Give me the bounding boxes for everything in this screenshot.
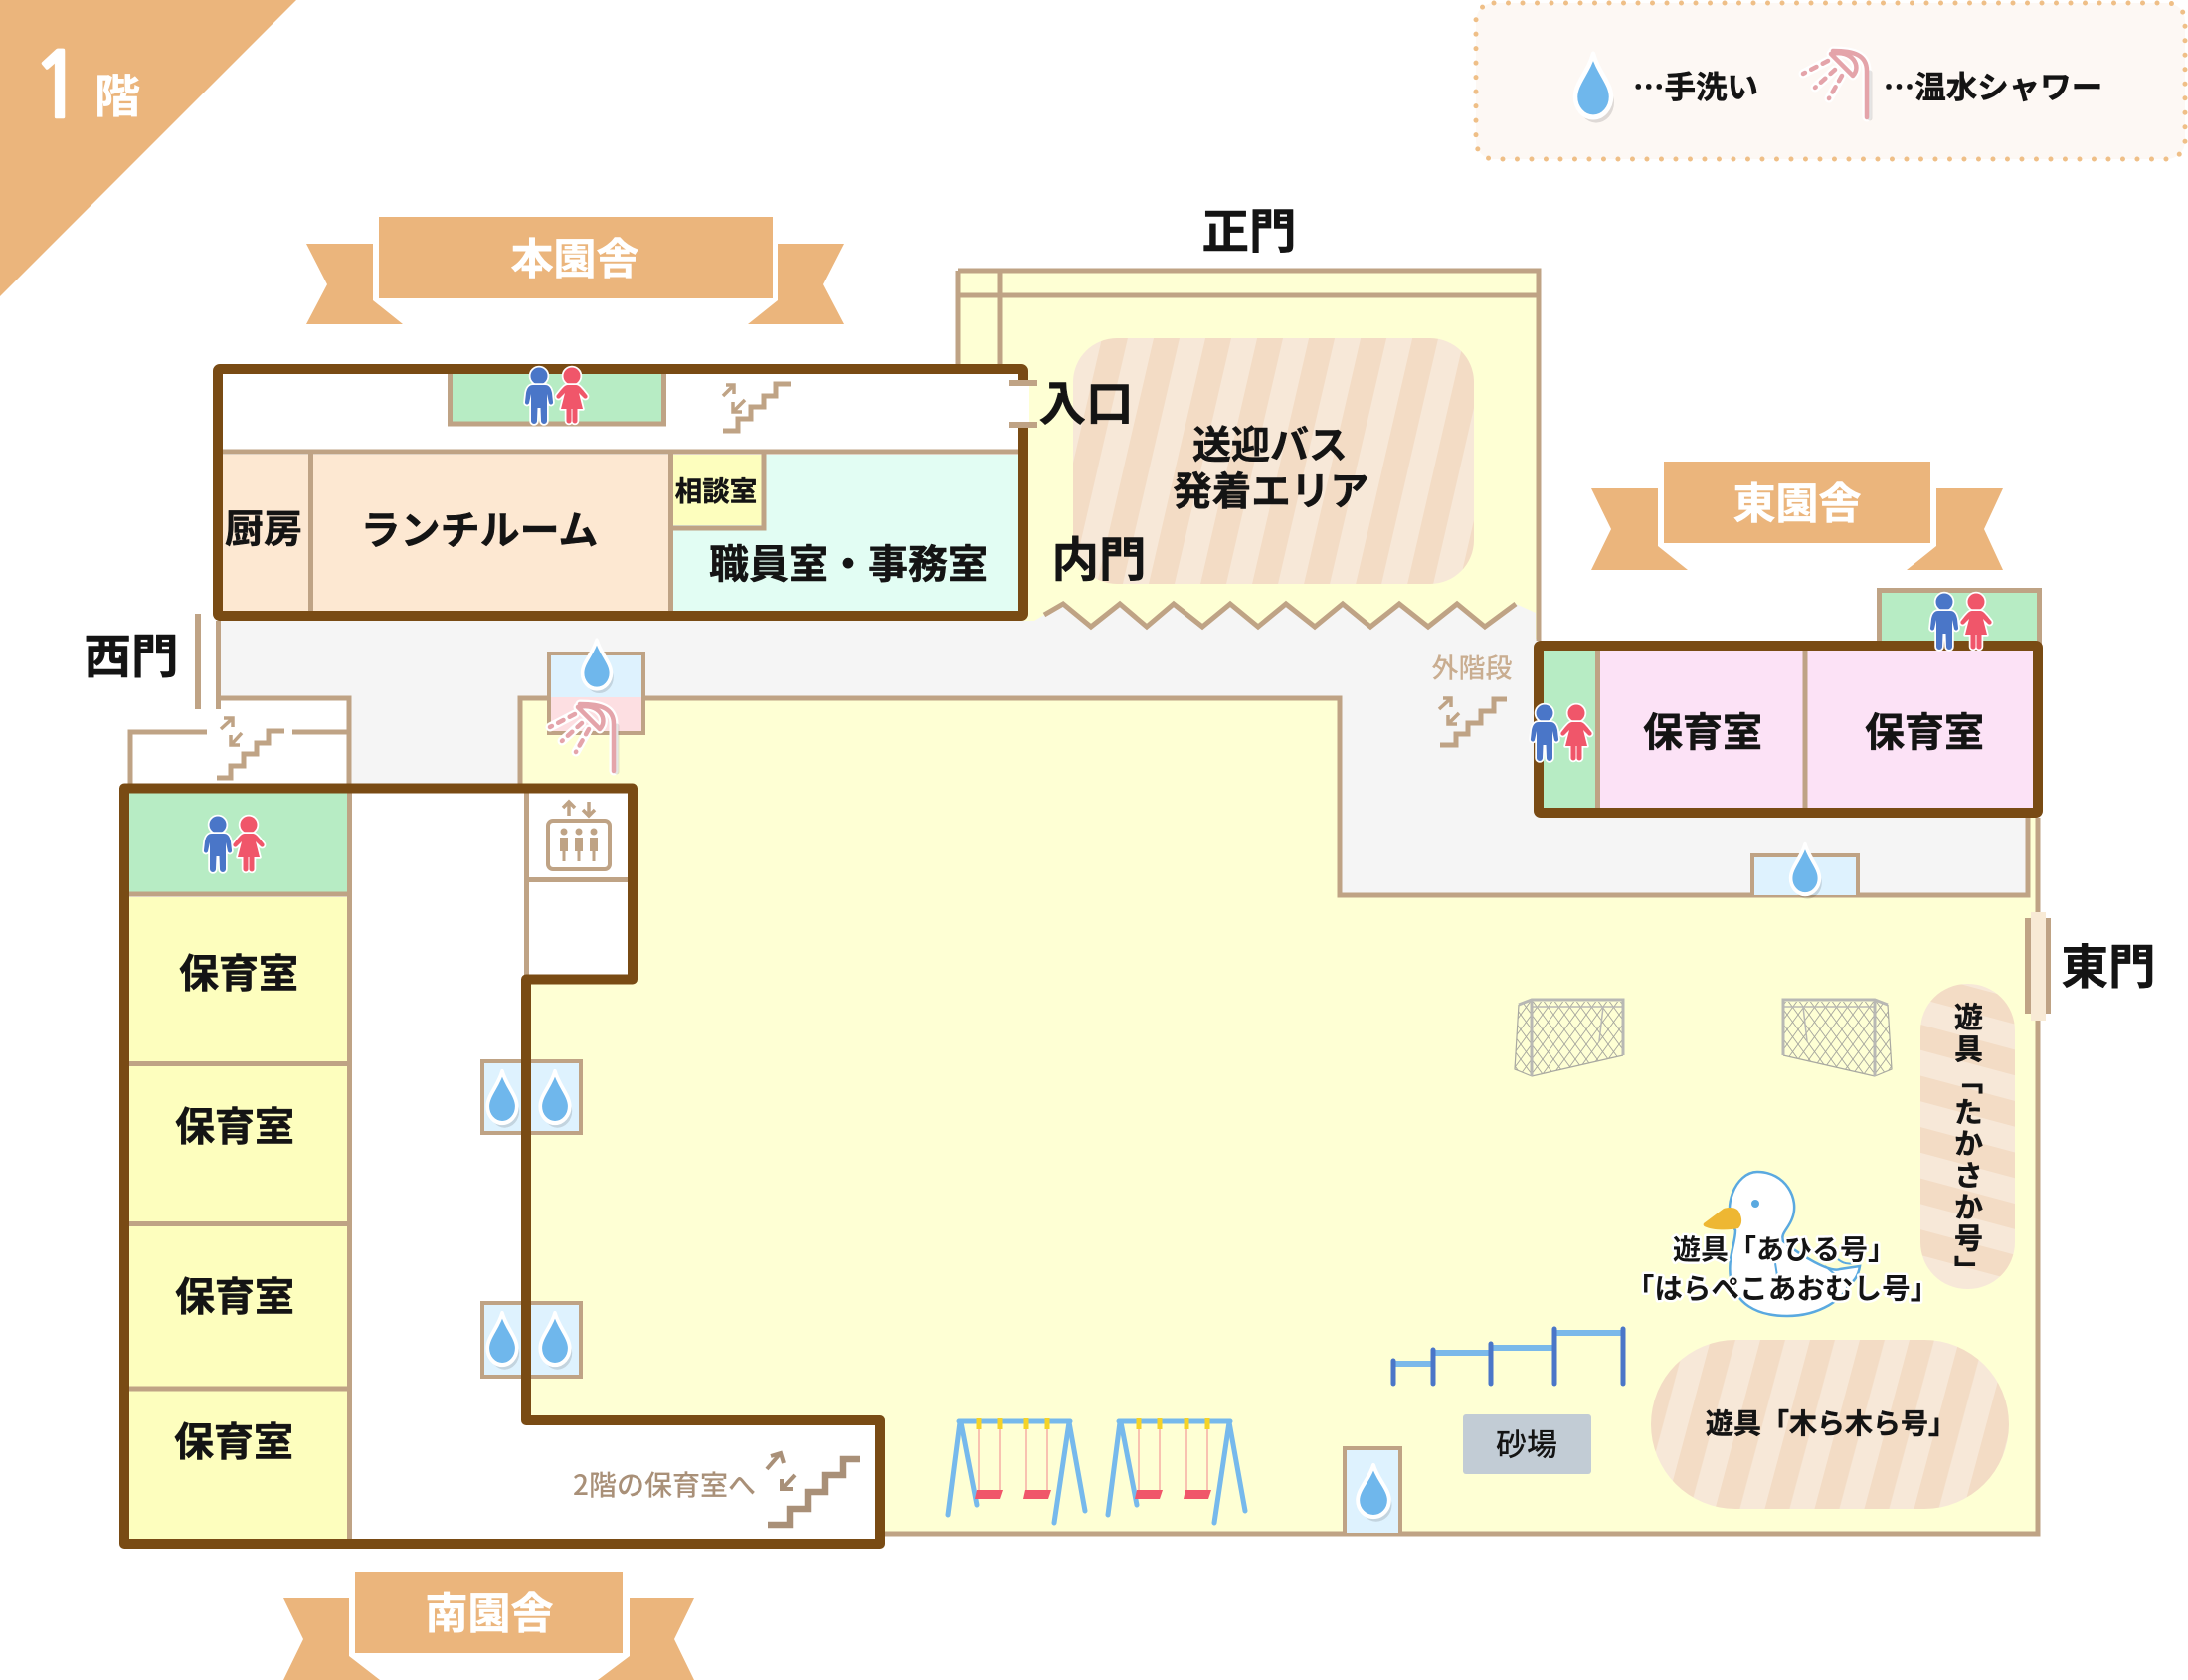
sinks on corridor bbox=[482, 1061, 581, 1377]
vertical label: 遊具「たかさか号」 bbox=[1947, 1002, 1989, 1287]
kitchen bbox=[223, 455, 308, 611]
label: classroom east 2: 保育室 bbox=[1865, 700, 1984, 758]
bus drop-off area bbox=[1073, 338, 1474, 584]
label: sand pit: 砂場 bbox=[1496, 1420, 1557, 1465]
room partitions bbox=[1597, 651, 1805, 808]
playground equipment: duck bbox=[1626, 1172, 1938, 1316]
label: bus area line 2: 発着エリア bbox=[1173, 461, 1369, 517]
water drop: east walkway bbox=[1791, 844, 1822, 899]
label: classroom 4: 保育室 bbox=[174, 1410, 293, 1468]
water drops: walkway sink bbox=[583, 640, 614, 693]
interior walls bbox=[129, 793, 628, 1540]
toilet room bbox=[450, 374, 664, 424]
soccer goal left bbox=[1515, 1000, 1623, 1076]
corner floor tab bbox=[0, 0, 296, 296]
toilet icons: main building bbox=[525, 368, 588, 424]
playground equipment: wooden bbox=[1651, 1340, 2009, 1509]
sink: playground bbox=[1345, 1448, 1400, 1533]
classroom 1 bbox=[129, 897, 347, 1062]
sand pit bbox=[1463, 1414, 1591, 1474]
floor label: 階 bbox=[94, 61, 140, 126]
label: inner gate: 内門 bbox=[1052, 522, 1146, 591]
main building bbox=[218, 369, 1037, 616]
label: classroom 2: 保育室 bbox=[175, 1095, 294, 1153]
monkey bars bbox=[1393, 1329, 1623, 1384]
label: classroom east 1: 保育室 bbox=[1643, 700, 1762, 758]
sink and shower by walkway bbox=[549, 653, 643, 733]
legend panel bbox=[1476, 3, 2185, 159]
icon: hand washing drop bbox=[1575, 54, 1614, 123]
icon: stairs to 2nd floor bbox=[767, 1453, 860, 1525]
label: entrance: 入口 bbox=[1038, 366, 1134, 435]
label: staff office: 職員室・事務室 bbox=[709, 532, 988, 590]
icon: elevator bbox=[548, 802, 610, 869]
label: outer stairs: 外階段 bbox=[1432, 648, 1512, 686]
swing set 1 bbox=[948, 1418, 1085, 1523]
label: main gate: 正門 bbox=[1201, 194, 1297, 263]
icon: stairs bbox=[723, 384, 791, 431]
floor number: 1 bbox=[30, 42, 86, 131]
label: 東園舎 bbox=[1732, 470, 1862, 532]
water drop bbox=[1358, 1465, 1391, 1522]
south building bbox=[124, 788, 880, 1544]
toilet room bbox=[129, 793, 347, 894]
east building bbox=[1539, 591, 2039, 813]
water drops: corridor sink lower bbox=[487, 1313, 572, 1370]
toilet icons: east building top bbox=[1930, 593, 1992, 650]
toilet icons: east building side bbox=[1531, 704, 1592, 761]
classroom 3 bbox=[129, 1226, 347, 1387]
paved grey walkway bbox=[219, 604, 2028, 895]
icon: outer stairs bbox=[1439, 698, 1507, 745]
grounds: front yard and main playground bbox=[520, 271, 2039, 1534]
east gate bbox=[2025, 912, 2051, 1021]
staff office bbox=[673, 455, 1018, 611]
soccer goal right bbox=[1783, 1000, 1892, 1076]
label: consult room: 相談室 bbox=[675, 469, 757, 509]
banner: east building bbox=[1591, 462, 2003, 570]
west stair room bbox=[130, 698, 349, 786]
legend text: hand washing: …手洗い bbox=[1633, 63, 1758, 108]
label: kitchen: 厨房 bbox=[225, 499, 302, 555]
label: west gate: 西門 bbox=[84, 619, 179, 687]
label: classroom 3: 保育室 bbox=[175, 1265, 294, 1323]
label: classroom 1: 保育室 bbox=[179, 942, 298, 1000]
label: 遊具「木ら木ら号」 bbox=[1706, 1402, 1956, 1442]
banner: south building bbox=[283, 1572, 694, 1680]
interior walls bbox=[223, 452, 1018, 611]
west gate post bbox=[195, 614, 201, 709]
label: 本園舎 bbox=[511, 226, 638, 287]
playground equipment: takasaka bbox=[1920, 984, 2015, 1289]
label: 南園舎 bbox=[426, 1581, 553, 1642]
sink: east walkway bbox=[1752, 855, 1858, 895]
water drops: corridor sink upper bbox=[487, 1071, 572, 1128]
label: duck line 2: 「はらぺこあおむし号」 bbox=[1626, 1267, 1938, 1308]
icon: west stairs bbox=[217, 718, 284, 778]
classroom 2 bbox=[129, 1066, 347, 1221]
banner: main building bbox=[306, 217, 844, 324]
label: stairs to 2nd floor: 2階の保育室へ bbox=[573, 1464, 756, 1504]
classroom 4 bbox=[129, 1391, 347, 1540]
label: bus area line 1: 送迎バス bbox=[1192, 415, 1348, 470]
label: lunch room: ランチルーム bbox=[361, 498, 598, 556]
upper toilet room bbox=[1880, 591, 2039, 645]
brown outline bbox=[124, 788, 880, 1544]
label: east gate: 東門 bbox=[2061, 929, 2156, 998]
icon: shower at walkway bbox=[550, 704, 617, 772]
entrance door bbox=[1009, 380, 1037, 428]
side toilet room bbox=[1544, 651, 1595, 808]
swing set 2 bbox=[1108, 1418, 1245, 1523]
legend text: warm shower: …温水シャワー bbox=[1884, 63, 2102, 108]
east outer wall box bbox=[1539, 646, 2038, 813]
icon: shower bbox=[1803, 51, 1870, 118]
lunch room bbox=[313, 455, 668, 611]
toilet icons: south building bbox=[204, 816, 265, 872]
label: duck line 1: 遊具「あひる号」 bbox=[1673, 1228, 1896, 1268]
consult room bbox=[673, 455, 762, 525]
